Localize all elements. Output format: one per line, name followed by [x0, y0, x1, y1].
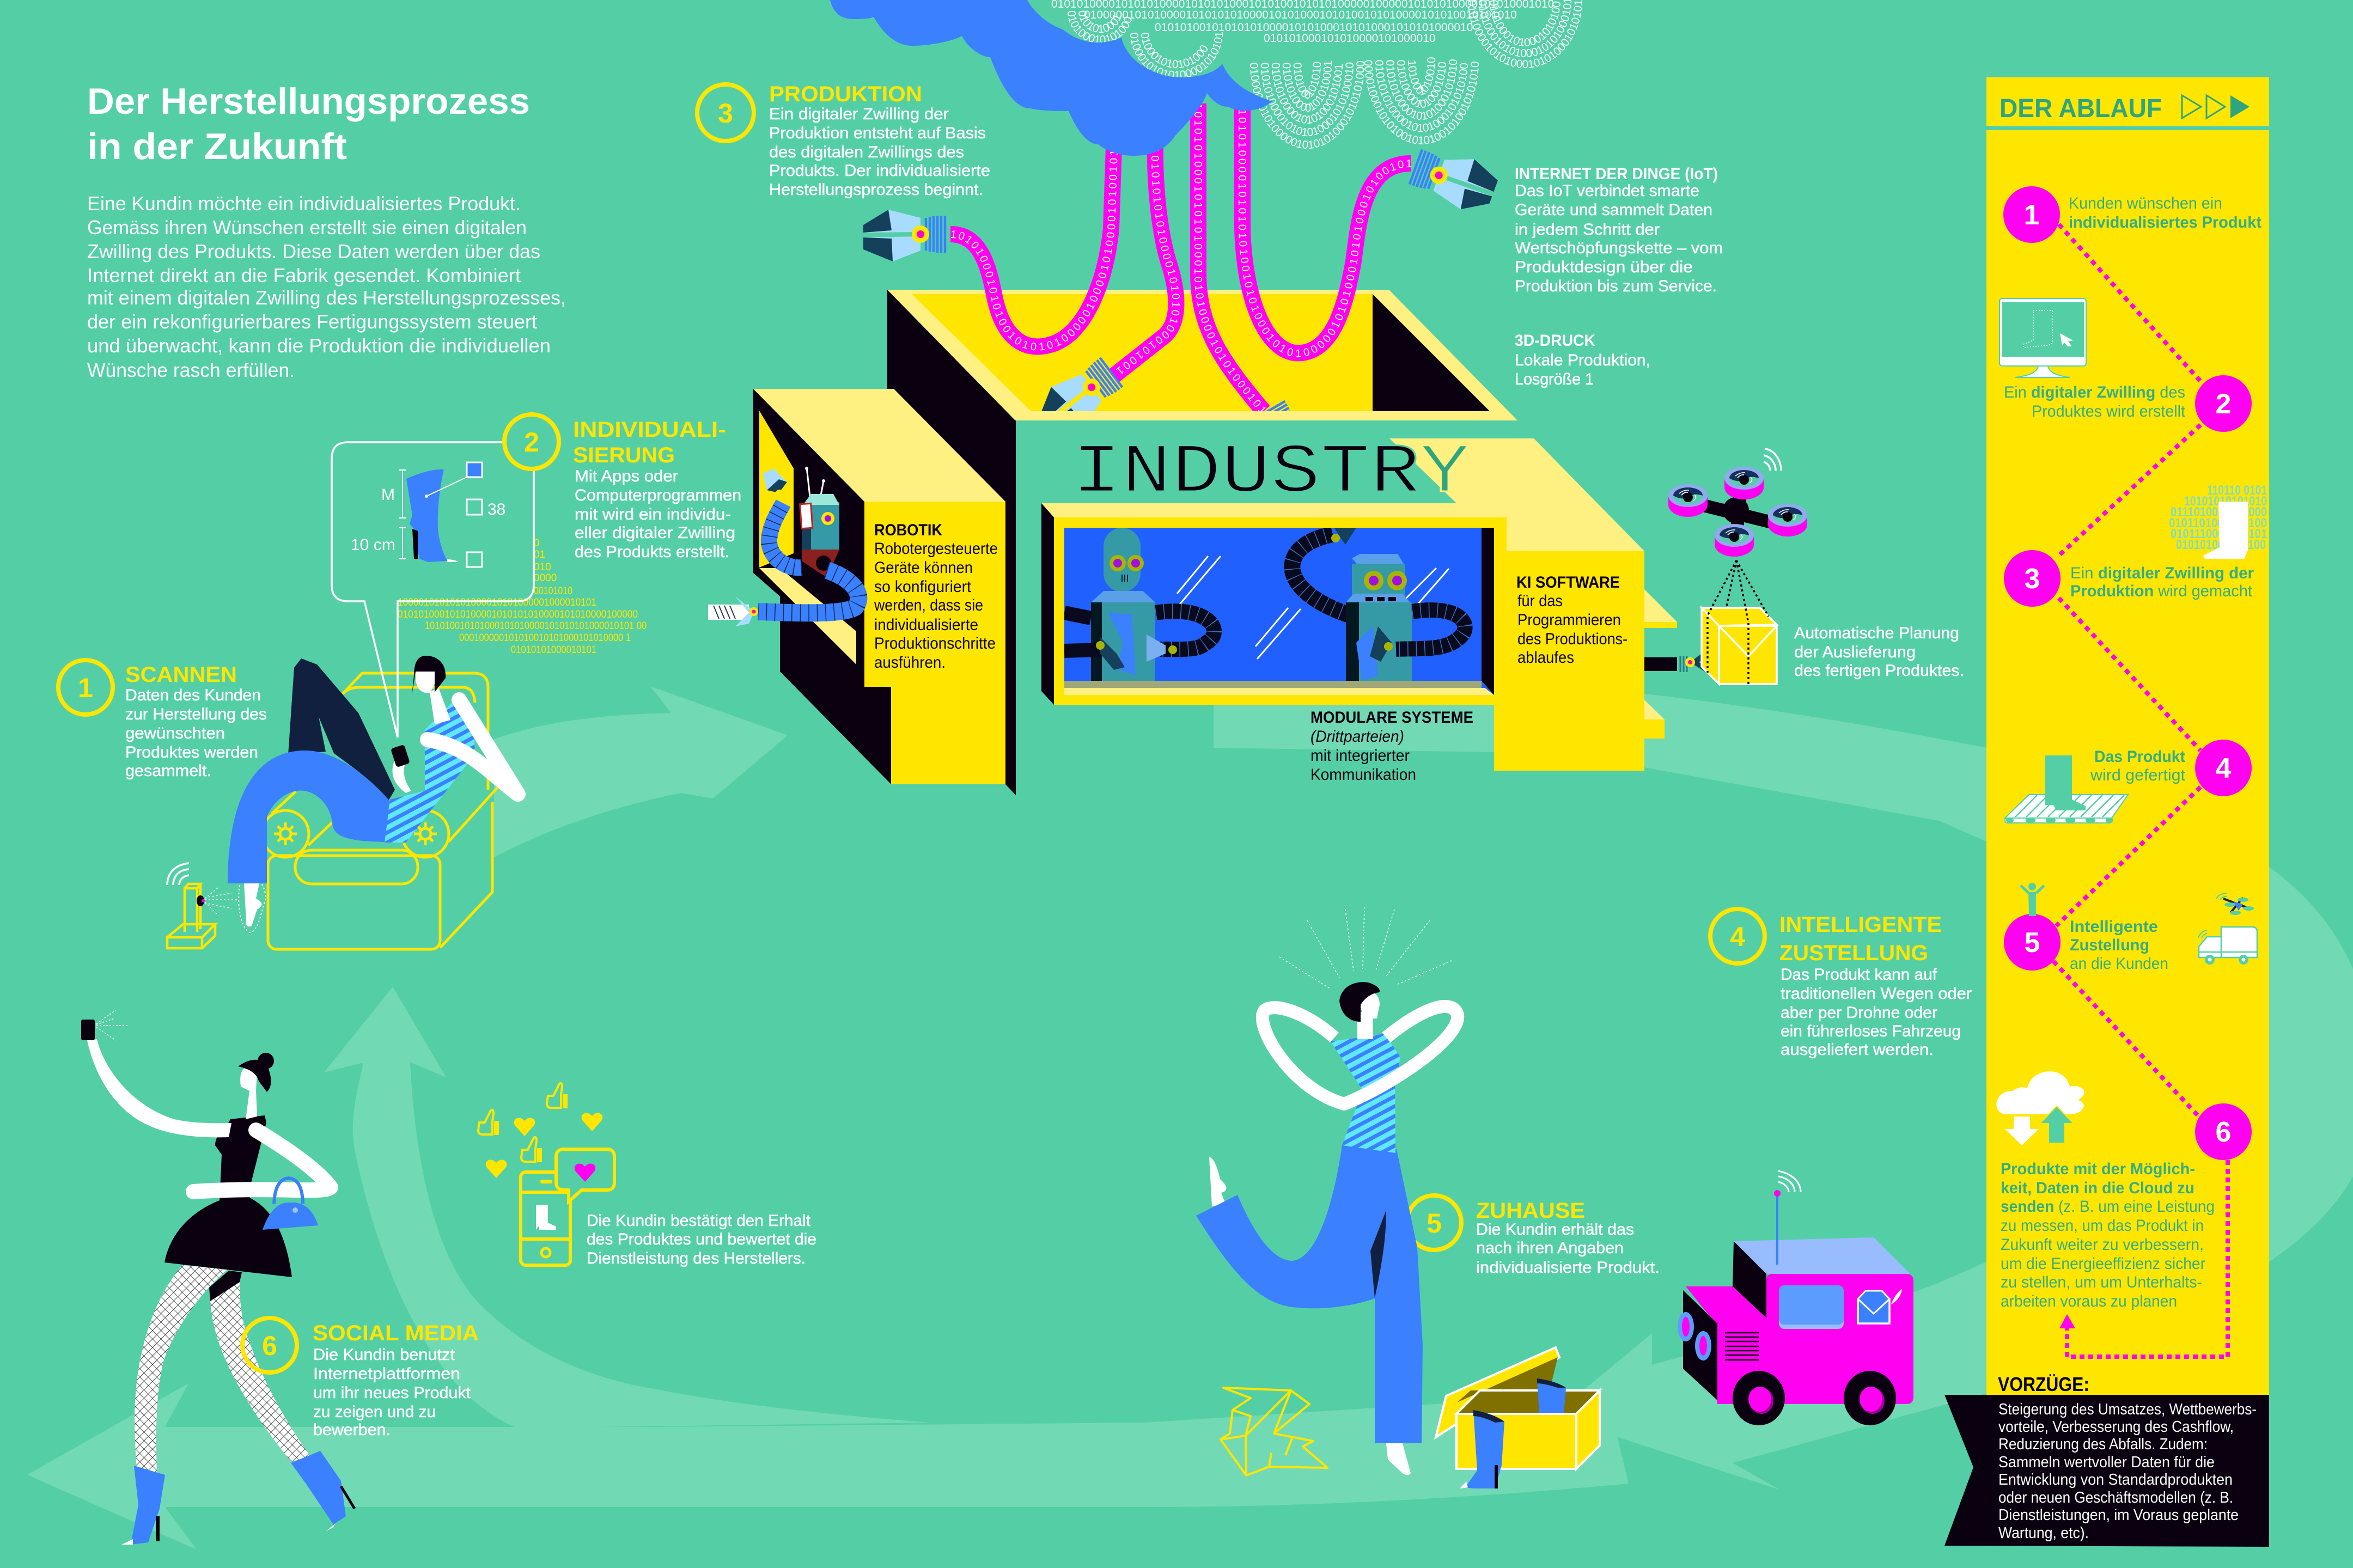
- text: Modulare Systeme: Kommunikation: [1310, 766, 1416, 784]
- step texts: Ein digitaler Zwilling des: [2004, 383, 2185, 401]
- package: [1702, 608, 1777, 684]
- step texts: Ein digitaler Zwilling der: [2070, 564, 2254, 582]
- binary stream from phone: 01: [534, 549, 545, 560]
- title: [87, 81, 530, 167]
- panel text: Robotik: ausführen.: [874, 654, 946, 672]
- step 6: Social Media: um ihr neues Produkt: [313, 1384, 471, 1402]
- step 6: Social Media: SOCIAL MEDIA: [313, 1321, 479, 1345]
- icon: digital boot: 0101110001000101: [2171, 527, 2267, 541]
- handbag: [263, 1203, 318, 1230]
- woman in armchair: [228, 656, 518, 932]
- step texts: Zukunft weiter zu verbessern,: [2001, 1236, 2204, 1254]
- step 4: Intelligente Zustellung: ZUSTELLUNG: [1779, 941, 1928, 965]
- legs: [135, 1265, 228, 1473]
- icon: digital boot: 110110 0101: [2207, 483, 2267, 498]
- text: Internet der Dinge: Produktdesign über die: [1515, 258, 1693, 276]
- step texts: keit, Daten in die Cloud zu: [2001, 1179, 2194, 1197]
- dotted path: [2053, 224, 2200, 1115]
- crumpled paper: [1221, 1388, 1327, 1475]
- step texts: Produkte mit der Möglich-: [2001, 1160, 2195, 1178]
- step 1: Scannen: zur Herstellung des: [125, 705, 267, 723]
- step 6: Social Media: [242, 1318, 479, 1439]
- panel: Vorzüge: Sammeln wertvoller Daten für die: [1998, 1454, 2215, 1471]
- icon: conveyor with boot: [2005, 755, 2128, 823]
- step 3: Produktion: [697, 82, 990, 199]
- step texts: senden (z. B. um eine Leistung: [2001, 1198, 2215, 1216]
- data cables with plugs: 1010100010101001010101000001000010100001010010101010101000010101010100010101: [0, 0, 1120, 353]
- step 5: Zuhause: nach ihren Angaben: [1476, 1239, 1624, 1257]
- step 4: Intelligente Zustellung: [1710, 909, 1972, 1059]
- text: Internet der Dinge: in jedem Schritt der: [1515, 221, 1660, 239]
- panel text: Robotik: Geräte können: [874, 559, 973, 577]
- step 3: Produktion: Produktion entsteht auf Basis: [769, 124, 986, 142]
- speech bubble with digital twin configurator: M: [381, 486, 395, 504]
- text: Modulare Systeme: [1310, 709, 1473, 784]
- binary stream from phone: 0000: [534, 572, 557, 584]
- step circles: 2: [2216, 388, 2231, 420]
- text: Internet der Dinge: INTERNET DER DINGE (IoT): [1515, 165, 1718, 183]
- icon: cloud with arrows: [1996, 1071, 2084, 1145]
- step 4: Intelligente Zustellung: INTELLIGENTE: [1779, 913, 1942, 937]
- icon: digital boot: 010101001010100: [2176, 538, 2266, 552]
- head and neck: [240, 1067, 257, 1119]
- step texts: Intelligente: [2070, 918, 2158, 936]
- icon: plug bottom left: [1041, 357, 1123, 411]
- panel: Vorzüge: Wartung, etc).: [1998, 1524, 2089, 1542]
- icon: plug bottom right: [1265, 400, 1290, 411]
- factory lettering: INDUSTR Y: [1072, 434, 1470, 513]
- text: 3D-Druck: Losgröße 1: [1515, 370, 1594, 388]
- step 1: Scannen: 1: [78, 673, 93, 703]
- text: automatische Planung: Automatische Planung: [1794, 624, 1959, 642]
- blue cloud: [830, 0, 1272, 156]
- armchair: [262, 673, 499, 949]
- text: Modulare Systeme: MODULARE SYSTEME: [1310, 709, 1473, 727]
- step texts: arbeiten voraus zu planen: [2001, 1292, 2177, 1310]
- text: Kundin bestätigt: [587, 1212, 816, 1267]
- data cables with plugs: 1010101010100001010101000101001000010101010: [0, 0, 1182, 378]
- window frame: [1041, 503, 1644, 771]
- step 2: Individualisierung: eller digitaler Zwilling: [575, 524, 735, 542]
- right ledges: [1644, 589, 1677, 739]
- panel text: Robotik: so konfiguriert: [874, 578, 972, 596]
- data cables with plugs: 10101010001010101000101010000101010001010101000010: [0, 0, 1270, 418]
- text: Kundin bestätigt: des Produktes und bewertet die: [587, 1230, 816, 1248]
- step texts: an die Kunden: [2070, 955, 2168, 973]
- step circles: 5: [2025, 927, 2040, 959]
- step 6: Social Media: Internetplattformen: [313, 1365, 460, 1383]
- intro text: Zwilling des Produkts. Diese Daten werden über das: [87, 240, 540, 263]
- step 4: Intelligente Zustellung: traditionellen Wegen oder: [1781, 985, 1972, 1003]
- binary stream from phone: 000100000101010010101000101010000 1: [459, 632, 631, 644]
- panel: Vorzüge: Steigerung des Umsatzes, Wettbewerbs-: [1998, 1401, 2257, 1418]
- step 3: Produktion: Produkts. Der individualisierte: [769, 162, 990, 180]
- arrow: bottom band to the left: [27, 1383, 1629, 1549]
- step 4: Intelligente Zustellung: aber per Drohne oder: [1781, 1004, 1937, 1022]
- step 4: Intelligente Zustellung: ausgeliefert werden.: [1781, 1041, 1934, 1059]
- robot in left block: [708, 467, 858, 626]
- text: Internet der Dinge: [1515, 165, 1723, 295]
- intro text: der ein rekonfigurierbares Fertigungssystem steuert: [87, 310, 537, 333]
- icon: digital boot: 0111010010001000: [2171, 505, 2267, 520]
- step 5: Zuhause: ZUHAUSE: [1476, 1199, 1585, 1223]
- step 2: Individualisierung: mit wird ein individu-: [575, 505, 731, 523]
- step 6: Social Media: bewerben.: [313, 1421, 391, 1439]
- step 2: Individualisierung: des Produkts erstellt.: [575, 543, 729, 561]
- panel text: KI Software: KI SOFTWARE: [1516, 573, 1620, 591]
- step circles: 6: [2216, 1116, 2231, 1148]
- title: Der Herstellungsprozess: [87, 81, 530, 122]
- binary stream from phone: 0: [534, 538, 540, 549]
- binary stream from phone: 0101010001010100001010101010000101010000100000: [398, 609, 638, 620]
- text: Kundin bestätigt: Dienstleistung des Herstellers.: [587, 1249, 806, 1267]
- panel: Der Ablauf: [1986, 77, 2269, 1395]
- delivery arm, package and drone: [1644, 449, 1807, 684]
- panel: Vorzüge: [1944, 1373, 2269, 1547]
- step 1: Scannen: Produktes werden: [125, 743, 258, 761]
- intro text: mit einem digitalen Zwilling des Herstellungsprozesses,: [87, 286, 566, 309]
- box front rim: [1015, 411, 1517, 420]
- intro text: Eine Kundin möchte ein individualisiertes Produkt.: [87, 192, 521, 215]
- arrow: flow from chair towards factory: [494, 686, 788, 857]
- step 1: Scannen: gewünschten: [125, 724, 225, 742]
- panel: Vorzüge: VORZÜGE:: [1998, 1373, 2089, 1395]
- binary data cloud: 010100010101000: [1068, 11, 1132, 42]
- panel: Vorzüge: Entwicklung von Standardprodukten: [1998, 1471, 2233, 1488]
- binary data cloud: 0101010001: [1078, 11, 1122, 33]
- icon: plug left: [863, 210, 945, 261]
- intro text: [87, 192, 566, 381]
- panel: Vorzüge: Dienstleistungen, im Voraus geplante: [1998, 1506, 2239, 1524]
- icon: foot scanner: [167, 863, 239, 948]
- step 5: Zuhause: individualisierte Produkt.: [1476, 1259, 1660, 1277]
- text: 3D-Druck: 3D-DRUCK: [1515, 332, 1595, 350]
- panel: Vorzüge: vorteile, Verbesserung des Cashflow,: [1998, 1418, 2234, 1436]
- speech bubble with digital twin configurator: 10 cm: [351, 536, 395, 554]
- text: 3D-Druck: Lokale Produktion,: [1515, 351, 1650, 369]
- panel text: Robotik: [874, 521, 998, 672]
- intro text: Wünsche rasch erfüllen.: [87, 359, 295, 381]
- data cables with plugs: [331, 14, 1498, 500]
- panel text: Robotik: werden, dass sie: [874, 596, 983, 614]
- panel text: KI Software: ablaufes: [1517, 649, 1574, 667]
- intro text: Gemäss ihren Wünschen erstellt sie einen digitalen: [87, 216, 527, 239]
- step texts: individualisiertes Produkt: [2069, 213, 2261, 231]
- text: Internet der Dinge: Geräte und sammelt Daten: [1515, 201, 1712, 219]
- text: automatische Planung: [1794, 624, 1964, 680]
- step 1: Scannen: [58, 660, 267, 780]
- step 1: Scannen: SCANNEN: [125, 663, 237, 687]
- binary data cloud: 010001010101000: [1141, 33, 1208, 69]
- step texts: [2001, 194, 2261, 1310]
- text: Internet der Dinge: Wertschöpfungskette – vom: [1515, 239, 1723, 257]
- icon: play triangles: [2182, 95, 2250, 118]
- binary stream from phone: 101010010101000101010000101010101000010101 00: [425, 620, 647, 632]
- panel: Vorzüge: Reduzierung des Abfalls. Zudem:: [1998, 1436, 2208, 1453]
- step texts: Das Produkt: [2094, 748, 2185, 766]
- step 2: Individualisierung: INDIVIDUALI-: [573, 418, 726, 442]
- panel text: KI Software: des Produktions-: [1517, 630, 1627, 648]
- step 4: Intelligente Zustellung: 4: [1730, 922, 1745, 952]
- arrow: upward sweep: [324, 987, 930, 1428]
- panel: window with robots: [1064, 528, 1494, 695]
- step texts: zu messen, um das Produkt in: [2001, 1217, 2204, 1235]
- window reflections: [1177, 556, 1449, 659]
- intro text: Internet direkt an die Fabrik gesendet. Kombiniert: [87, 264, 521, 286]
- step 2: Individualisierung: [504, 414, 741, 561]
- step circles: [2003, 186, 2252, 1160]
- panel text: Robotik: ROBOTIK: [874, 521, 942, 539]
- robot left: [1064, 528, 1214, 681]
- dancing woman at home: [1196, 907, 1458, 1475]
- arrow: ring from factory round to delivery: [1214, 694, 2353, 1490]
- dress: [215, 1115, 266, 1201]
- binary data cloud: 01000101010100001010101: [1130, 32, 1223, 77]
- factory left block: [753, 389, 1005, 784]
- data cables with plugs: 1010100001010101010010101000101010000010101000101010001010010101010010101000010101: [0, 0, 1414, 360]
- step 5: Zuhause: [1407, 1195, 1660, 1277]
- drone: [1668, 449, 1807, 557]
- step 3: Produktion: 3: [718, 98, 733, 129]
- step 2: Individualisierung: SIERUNG: [573, 443, 675, 467]
- step circles: 1: [2024, 199, 2039, 231]
- delivery truck: [1678, 1171, 1913, 1425]
- step 4: Intelligente Zustellung: Das Produkt kann auf: [1781, 966, 1937, 984]
- step 3: Produktion: Ein digitaler Zwilling der: [769, 105, 949, 123]
- text: 3D-Druck: [1515, 332, 1650, 388]
- step 4: Intelligente Zustellung: ein führerloses Fahrzeug: [1781, 1022, 1961, 1040]
- intro text: und überwacht, kann die Produktion die individuellen: [87, 334, 551, 357]
- step circles: 4: [2216, 753, 2232, 784]
- panel text: KI Software: für das: [1517, 592, 1563, 610]
- step 3: Produktion: Herstellungsprozess beginnt.: [769, 181, 983, 199]
- step 1: Scannen: gesammelt.: [125, 762, 211, 780]
- icon: small drone and truck: [2198, 893, 2257, 965]
- step 5: Zuhause: Die Kundin erhält das: [1476, 1221, 1634, 1238]
- icon: digital boot: [2169, 483, 2267, 559]
- text: automatische Planung: des fertigen Produktes.: [1794, 662, 1964, 680]
- step 6: Social Media: zu zeigen und zu: [313, 1403, 436, 1421]
- arms: [87, 1039, 231, 1137]
- speech bubble with digital twin configurator: 38: [487, 501, 505, 518]
- step circles: 3: [2025, 563, 2040, 595]
- title: in der Zukunft: [87, 126, 347, 167]
- text: Kundin bestätigt: Die Kundin bestätigt den Erhalt: [587, 1212, 811, 1230]
- binary stream from phone: [398, 538, 647, 656]
- icon: digital boot: 0101101000100100: [2169, 516, 2267, 530]
- icon: monitor: [2000, 298, 2086, 377]
- icon: person: [2021, 883, 2044, 916]
- phone: [81, 1020, 95, 1040]
- step texts: Produktes wird erstellt: [2032, 402, 2186, 420]
- panel text: Robotik: Produktionschritte: [874, 634, 996, 652]
- step texts: Kunden wünschen ein: [2069, 194, 2222, 212]
- binary stream from phone: 10000101010101000010101000001000010101: [398, 597, 596, 608]
- step texts: wird gefertigt: [2090, 766, 2186, 784]
- step 2: Individualisierung: 2: [524, 427, 539, 457]
- step 2: Individualisierung: Mit Apps oder: [575, 467, 678, 485]
- robot right: [1292, 528, 1465, 681]
- text: Modulare Systeme: mit integrierter: [1310, 747, 1410, 765]
- binary stream from phone: 01010101000010101: [511, 644, 596, 656]
- open gift box with boots: [1436, 1347, 1600, 1488]
- social media icons: [478, 1083, 614, 1265]
- speech bubble with digital twin configurator: [332, 442, 534, 737]
- step 3: Produktion: PRODUKTION: [769, 82, 922, 106]
- step 2: Individualisierung: Computerprogrammen: [575, 486, 741, 504]
- step 3: Produktion: des digitalen Zwillings des: [769, 143, 964, 161]
- text: Modulare Systeme: (Drittparteien): [1310, 728, 1404, 746]
- step texts: Produktion wird gemacht: [2070, 582, 2253, 600]
- icon: digital boot: 10101010101010: [2184, 494, 2267, 509]
- back of factory: open roof box: [887, 290, 1517, 795]
- panel text: KI Software: Programmieren: [1517, 611, 1621, 629]
- suspension lines: [1708, 560, 1769, 684]
- options: [399, 462, 482, 567]
- step 5: Zuhause: 5: [1427, 1208, 1442, 1238]
- step 6: Social Media: 6: [262, 1331, 277, 1361]
- selfie woman: [81, 1010, 355, 1545]
- heading: DER ABLAUF: [2000, 94, 2162, 123]
- binary stream from phone: 00101010: [534, 585, 572, 597]
- panel text: Robotik: individualisierte: [874, 616, 978, 634]
- text: Internet der Dinge: Produktion bis zum Service.: [1515, 277, 1717, 295]
- icon: plug right: [1409, 149, 1498, 209]
- step texts: um die Energieeffizienz sicher: [2001, 1255, 2205, 1273]
- step 1: Scannen: Daten des Kunden: [125, 686, 261, 704]
- boot: [406, 469, 447, 562]
- arm: [1644, 657, 1677, 671]
- panel text: Robotik: Robotergesteuerte: [874, 540, 998, 558]
- factory front: right wing roof: [1041, 438, 1644, 599]
- step 6: Social Media: Die Kundin benutzt: [313, 1346, 455, 1364]
- panel: Vorzüge: oder neuen Geschäftsmodellen (z. B.: [1998, 1489, 2233, 1506]
- panel text: KI Software: [1516, 573, 1627, 667]
- binary stream from phone: 010: [534, 562, 551, 573]
- text: automatische Planung: der Auslieferung: [1794, 643, 1916, 661]
- step texts: Zustellung: [2070, 936, 2149, 954]
- step texts: zu stellen, um um Unterhalts-: [2001, 1273, 2202, 1291]
- text: Internet der Dinge: Das IoT verbindet smarte: [1515, 182, 1699, 200]
- boots: [131, 1466, 165, 1545]
